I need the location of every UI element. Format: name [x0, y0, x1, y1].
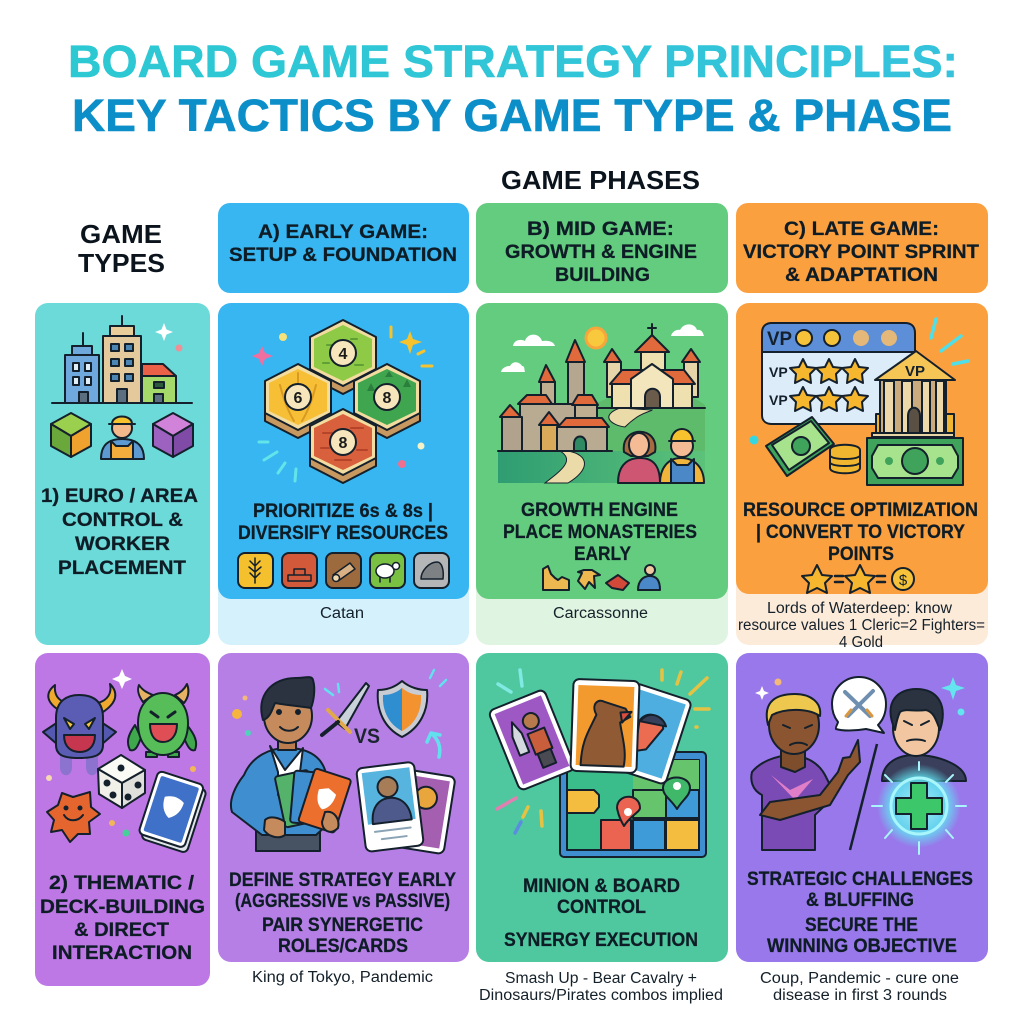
caption: smash up [479, 970, 723, 1004]
hex: brick 8: 8 [339, 435, 348, 452]
conversion icons [802, 565, 914, 593]
hex: grass 4 [310, 320, 376, 394]
strategy text: EARLY [574, 544, 631, 565]
row label: PLACEMENT [58, 558, 186, 579]
strategy text: & BLUFFING [806, 890, 914, 911]
title: BOARD GAME STRATEGY PRINCIPLES: [68, 36, 958, 87]
row label [40, 873, 205, 964]
icon: purple cube [153, 413, 193, 457]
row label: & DIRECT [74, 920, 169, 941]
icon: shield [378, 681, 427, 737]
hex: forest 8 [354, 364, 420, 438]
vs label: VS [354, 725, 380, 748]
caption: coup, pandemic: disease in first 3 rounds [773, 987, 947, 1004]
hex: brick 8 [310, 409, 376, 483]
strategy text: DIVERSIFY RESOURCES [238, 523, 448, 544]
dot [750, 436, 758, 444]
icon: city buildings [52, 316, 192, 403]
decorative sparkles [755, 677, 965, 716]
heading: game types: TYPES [78, 250, 165, 278]
illustration: victory point board [762, 323, 915, 424]
title: KEY TACTICS BY GAME TYPE & PHASE [72, 90, 952, 141]
vp pediment label: VP [905, 363, 925, 380]
panel: carcassonne mid game [476, 303, 728, 645]
column header: late game: C) LATE GAME: [784, 219, 939, 240]
strategy text: SECURE THE [805, 915, 918, 936]
column header: early game: A) EARLY GAME: [258, 222, 428, 243]
conversion icons: $ [899, 572, 908, 589]
divider line [850, 744, 877, 850]
panel: strategic challenges and bluffing [736, 653, 988, 1004]
icon: role cards [356, 762, 456, 854]
decorative dots [46, 766, 196, 836]
icon: speech bubble [832, 677, 886, 733]
icon: green cube [51, 413, 91, 457]
strategy text: PRIORITIZE 6s & 8s | [253, 501, 433, 522]
panel: minion and board control [476, 653, 728, 1004]
meeple icons [543, 565, 660, 590]
column header: mid game: B) MID GAME: [527, 219, 674, 240]
icon: orange critter [47, 792, 100, 842]
strategy text [743, 500, 978, 565]
illustration: catan hexes [265, 320, 420, 483]
illustration: board map [560, 752, 706, 857]
row label: WORKER [75, 534, 170, 555]
strategy text: ROLES/CARDS [278, 936, 408, 957]
panel: define strategy early [218, 653, 469, 986]
vp labels: VP [769, 392, 788, 408]
icon: worker [101, 416, 144, 459]
strategy text: SYNERGY EXECUTION [504, 930, 698, 951]
motion accents [497, 670, 709, 833]
icon: dice [98, 755, 145, 808]
strategy text: (AGGRESSIVE vs PASSIVE) [235, 891, 450, 912]
heading: game types: GAME [80, 221, 162, 249]
caption: lords of waterdeep: 4 Gold [839, 634, 883, 651]
caption: coup, pandemic: Coup, Pandemic - cure one [760, 970, 959, 987]
heading: game phases: GAME PHASES [501, 167, 700, 195]
icon: sparkle [112, 669, 132, 689]
strategy text [238, 501, 448, 544]
caption: smash up: Dinosaurs/Pirates combos implied [479, 987, 723, 1004]
panel: euro / area control row header [35, 303, 210, 645]
strategy text: MINION & BOARD [523, 876, 680, 897]
icon: purple monster [43, 684, 116, 775]
strategy text: PLACE MONASTERIES [503, 522, 697, 543]
monastery [598, 324, 705, 408]
column header: early game: SETUP & FOUNDATION [229, 245, 457, 266]
strategy text: | CONVERT TO VICTORY [756, 522, 965, 543]
hex: wheat 6: 6 [294, 390, 303, 407]
vp labels: VP [767, 329, 792, 350]
strategy text: RESOURCE OPTIMIZATION [743, 500, 978, 521]
decorative sparkles [252, 327, 432, 481]
row label: DECK-BUILDING [40, 897, 205, 918]
illustration: player pointing [751, 694, 860, 850]
icon: glowing cross [872, 762, 966, 854]
heading: game types [78, 221, 165, 278]
icon: card deck [137, 771, 208, 853]
strategy text [504, 876, 698, 951]
row label [41, 486, 198, 579]
column header: early game [218, 203, 469, 293]
row label: INTERACTION [52, 943, 192, 964]
decorative dots [232, 670, 446, 736]
row label: 1) EURO / AREA [41, 486, 198, 507]
illustration: man holding cards [231, 677, 351, 851]
hex: grass 4: 4 [339, 346, 348, 363]
column header: mid game [476, 203, 728, 293]
temple and money [766, 351, 963, 485]
sparkles [931, 319, 968, 364]
walled town [498, 340, 612, 451]
icon: sword [322, 683, 369, 735]
strategy text: GROWTH ENGINE [521, 500, 678, 521]
strategy text: POINTS [828, 544, 894, 565]
column header: late game: & ADAPTATION [785, 265, 938, 286]
column header: mid game: GROWTH & ENGINE [505, 242, 697, 263]
row label: 2) THEMATIC / [49, 873, 195, 894]
strategy text: WINNING OBJECTIVE [767, 936, 957, 957]
strategy text [503, 500, 697, 565]
clouds [501, 324, 704, 372]
column header: mid game: BUILDING [555, 265, 650, 286]
panel: lords of waterdeep late game [736, 303, 988, 651]
caption: lords of waterdeep [738, 600, 985, 651]
icon: green monster [128, 684, 196, 757]
row label: CONTROL & [62, 510, 183, 531]
caption: coup, pandemic [760, 970, 959, 1004]
strategy text: PAIR SYNERGETIC [262, 915, 423, 936]
illustration: opponent [882, 689, 966, 781]
column header: late game [736, 203, 988, 293]
people [618, 429, 704, 483]
caption: king of tokyo, pandemic: King of Tokyo, Pandemic [252, 969, 433, 986]
title [68, 36, 958, 141]
resource icons [238, 553, 449, 588]
panel: catan early game [218, 303, 469, 645]
column header: late game: VICTORY POINT SPRINT [743, 242, 979, 263]
caption: catan: Catan [320, 605, 364, 622]
star rows [790, 359, 868, 411]
panel: thematic row header [35, 653, 210, 986]
vp labels [767, 329, 792, 408]
hex: wheat 6 [265, 364, 331, 438]
caption: carcassonne: Carcassonne [553, 605, 648, 622]
vp labels: VP [769, 364, 788, 380]
hex: forest 8: 8 [383, 390, 392, 407]
caption: lords of waterdeep: Lords of Waterdeep: know [767, 600, 953, 617]
caption: smash up: Smash Up - Bear Cavalry + [505, 970, 697, 987]
strategy text: DEFINE STRATEGY EARLY [229, 870, 456, 891]
caption: lords of waterdeep: resource values 1 Cleric=2 Fighters= [738, 617, 985, 634]
strategy text: STRATEGIC CHALLENGES [747, 869, 973, 890]
icon: cyan arrow [427, 733, 440, 757]
strategy text [229, 870, 456, 957]
strategy text: CONTROL [557, 897, 646, 918]
illustration: faction cards [488, 679, 692, 791]
icon: sparkle and dot [155, 323, 182, 352]
strategy text [747, 869, 973, 957]
illustration: medieval landscape [498, 324, 705, 483]
